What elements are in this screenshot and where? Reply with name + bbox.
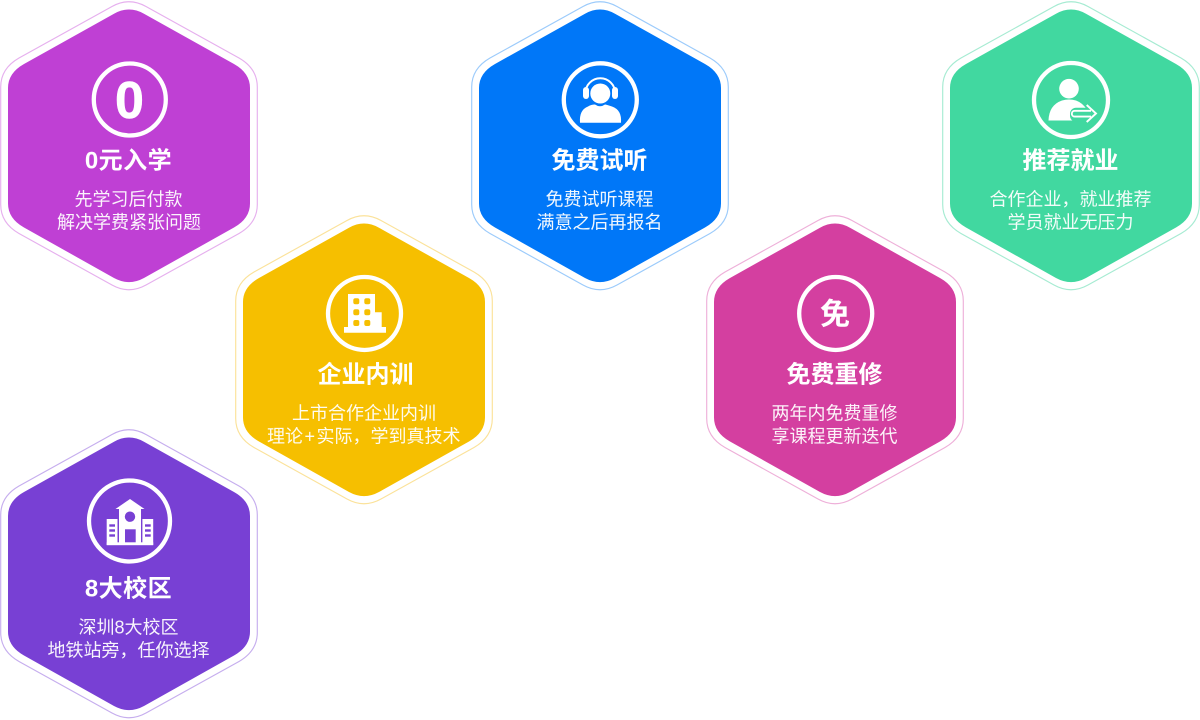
icon: person with arrow (1034, 63, 1108, 137)
text: 8大校区 description: 深圳8大校区 (78, 618, 179, 638)
text: 0元入学 description: 先学习后付款 (74, 190, 182, 210)
text: 0元入学 description (57, 190, 201, 232)
text: 免费重修 description: 享课程更新迭代 (772, 426, 898, 446)
panel: 免费试听 (472, 2, 728, 290)
icon: zero in ring: 0 (115, 72, 144, 130)
text: 免费试听 description (536, 190, 662, 232)
icon: zero in ring (94, 64, 166, 136)
heading: 0元入学: 0元入学 (85, 148, 172, 174)
text: 免费试听 description: 满意之后再报名 (536, 212, 662, 232)
text: 0元入学 description: 解决学费紧张问题 (57, 212, 201, 232)
text: 免费重修 description (772, 404, 898, 446)
text: 推荐就业 description (990, 190, 1152, 232)
panel: 免费重修 (707, 216, 963, 504)
icon: campus building (89, 480, 170, 562)
text: 推荐就业 description: 合作企业，就业推荐 (990, 190, 1152, 210)
icon: headset user (564, 63, 637, 136)
icon: office building (328, 277, 401, 350)
text: 8大校区 description: 地铁站旁，任你选择 (48, 640, 210, 660)
text: 企业内训 description (267, 404, 461, 446)
panel: 推荐就业 (943, 2, 1199, 290)
text: 8大校区 description (48, 618, 210, 660)
heading: 8大校区: 8大校区 (85, 576, 172, 602)
text: 免费试听 description: 免费试听课程 (546, 190, 654, 210)
heading: 免费重修: 免费重修 (786, 362, 882, 388)
text: 免费重修 description: 两年内免费重修 (772, 404, 898, 424)
panel: 企业内训 (236, 216, 492, 504)
heading: 免费试听: 免费试听 (552, 148, 648, 174)
panel: 8大校区 (1, 430, 257, 718)
heading: 企业内训: 企业内训 (318, 362, 414, 388)
panel: 0元入学 (1, 2, 257, 290)
heading: 推荐就业: 推荐就业 (1022, 148, 1118, 174)
text: 推荐就业 description: 学员就业无压力 (1008, 212, 1134, 232)
text: 企业内训 description: 理论+实际，学到真技术 (267, 426, 461, 446)
icon: 免 in ring (799, 277, 872, 350)
icon: 免 in ring: 免 (820, 298, 850, 332)
text: 企业内训 description: 上市合作企业内训 (292, 404, 436, 424)
